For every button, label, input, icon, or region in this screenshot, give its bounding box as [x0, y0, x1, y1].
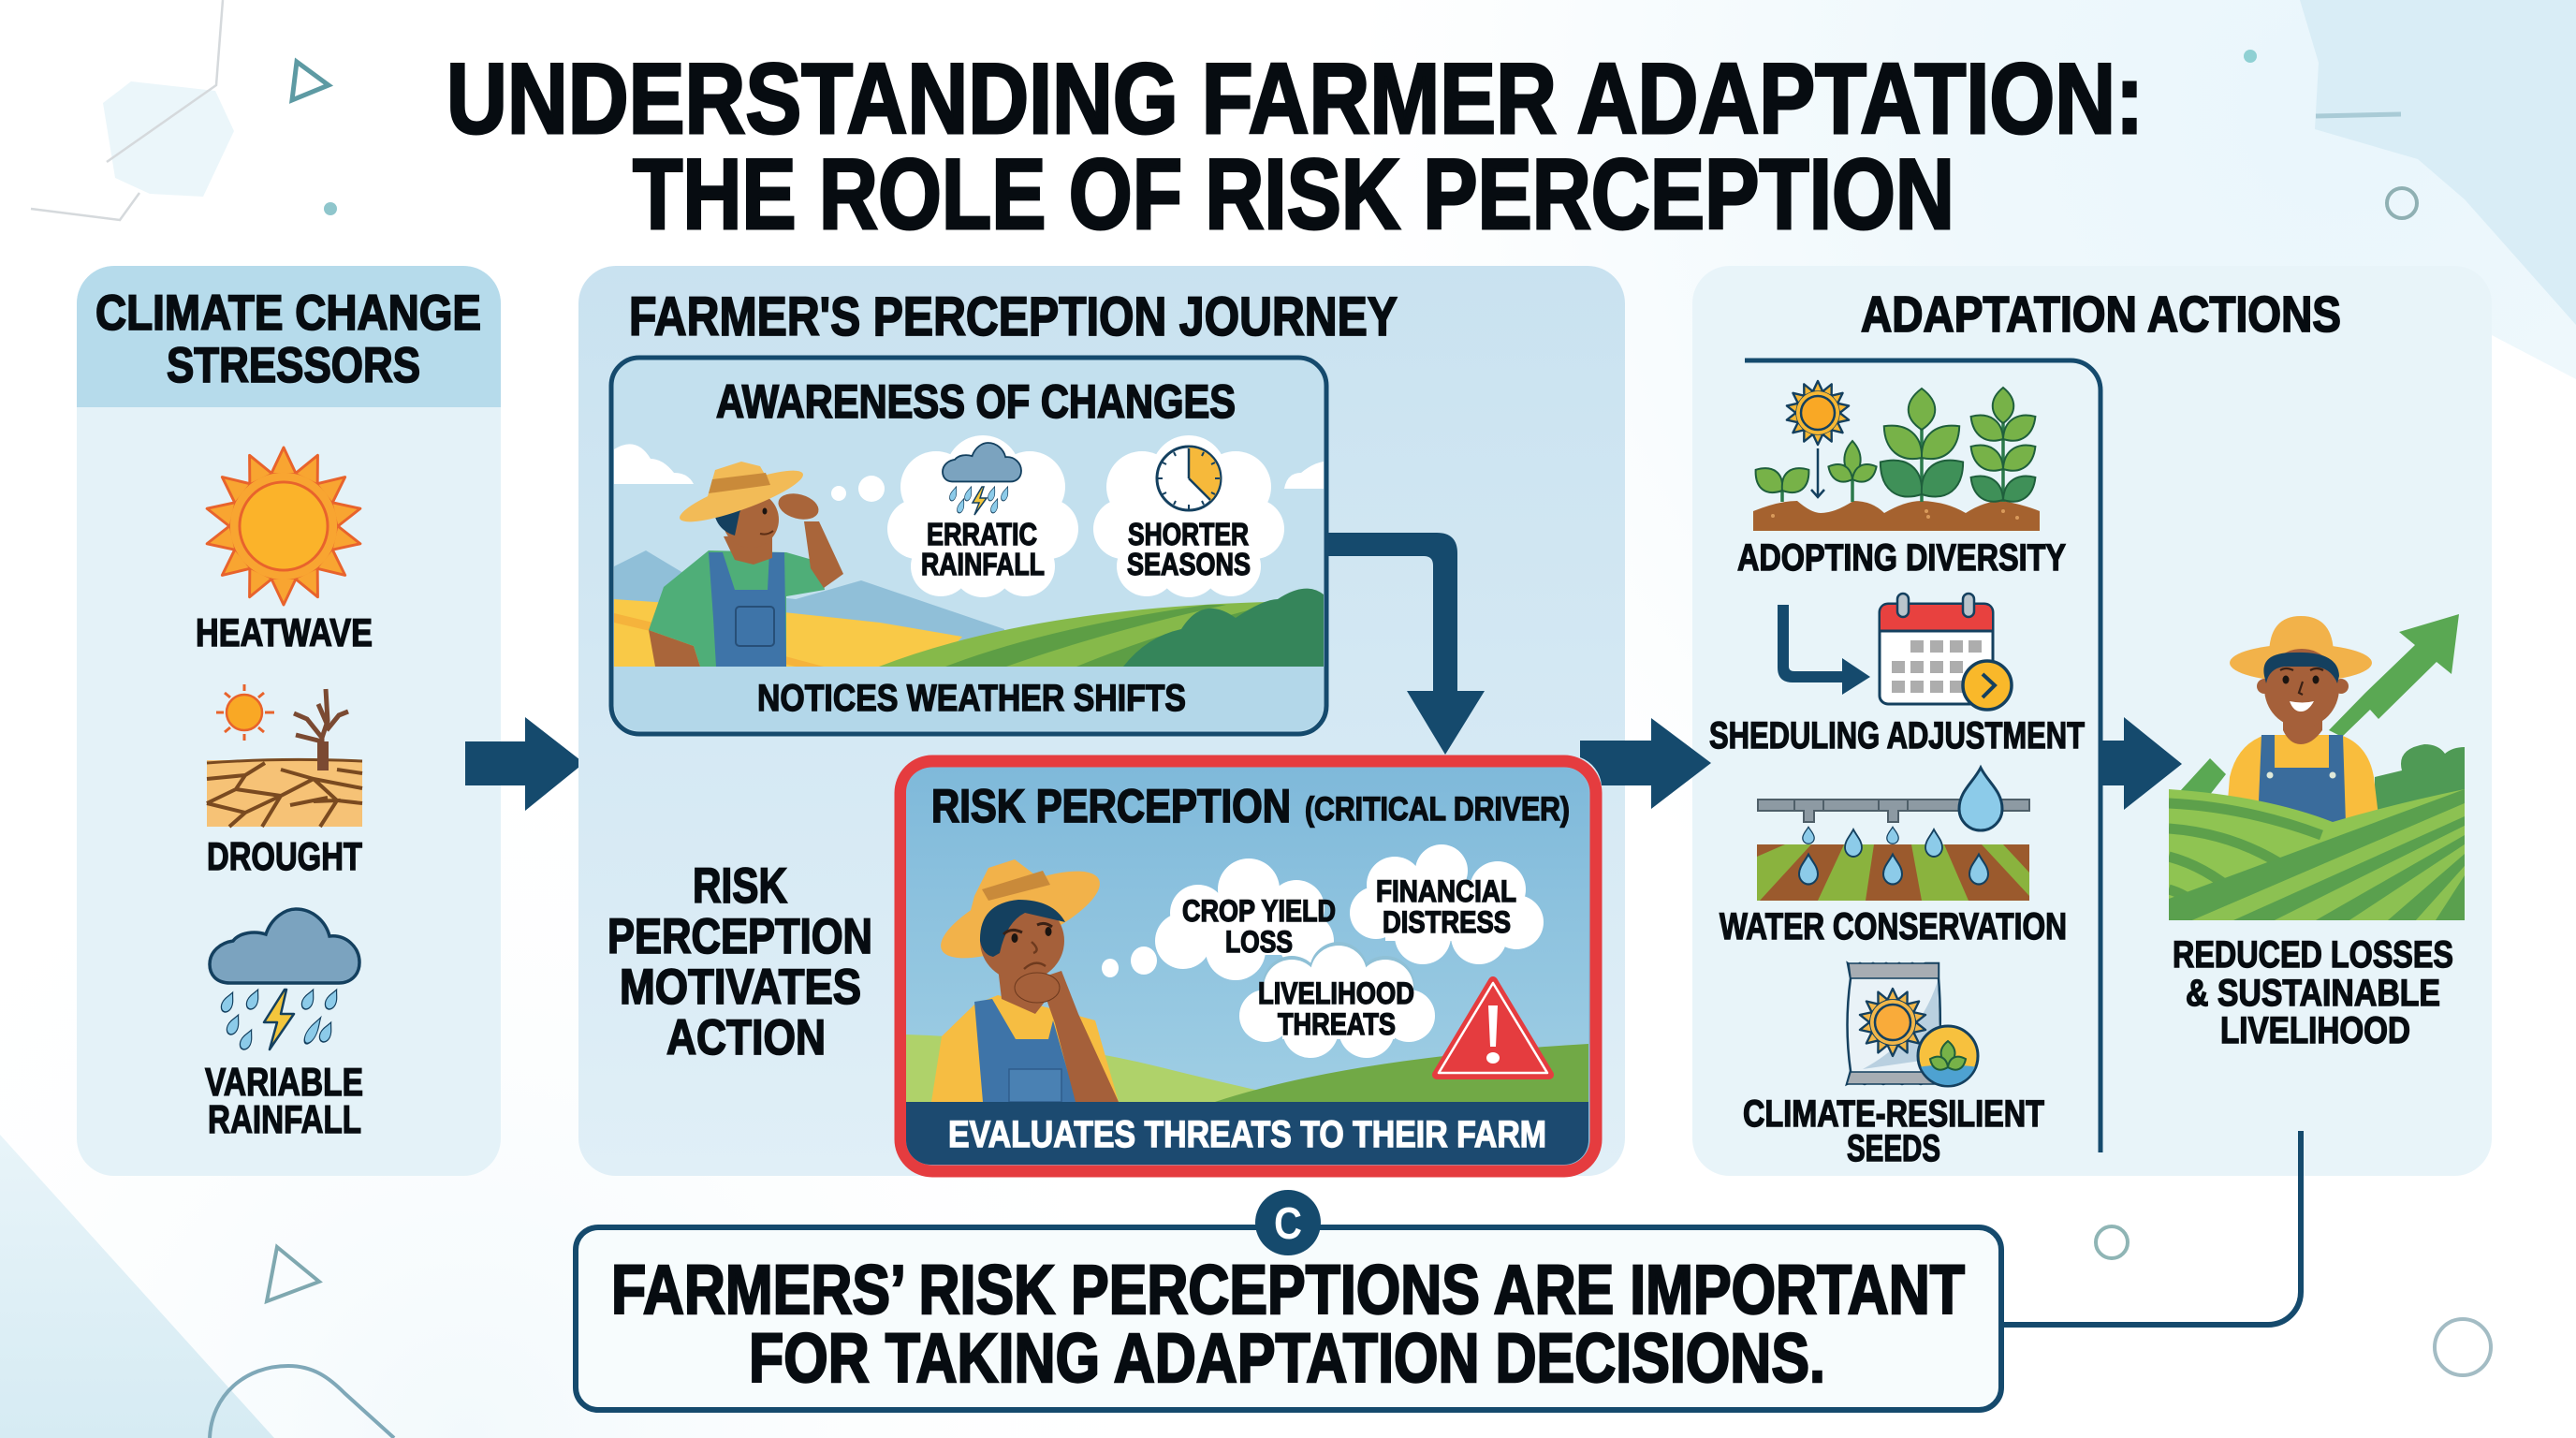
label: reduced losses: LIVELIHOOD: [2220, 1010, 2410, 1051]
label: water conservation: WATER CONSERVATION: [1720, 906, 2067, 947]
thought cloud: shorter seasons: [1093, 435, 1284, 597]
farmer thinking: [930, 854, 1119, 1102]
text: risk perception motivates action: MOTIVATES: [620, 960, 861, 1015]
outcome: reduced losses and sustainable livelihood: [2169, 614, 2465, 1051]
thought cloud: crop yield loss: [1155, 858, 1336, 980]
card heading: risk perception critical driver: (CRITICAL DRIVER): [1305, 791, 1570, 828]
icon: rain cloud: [210, 909, 359, 1051]
text: risk perception motivates action: [607, 858, 872, 1065]
icon: sun heatwave: [204, 448, 363, 605]
thought cloud: financial distress: DISTRESS: [1383, 905, 1511, 939]
card heading: risk perception critical driver: RISK PERCEPTION: [931, 780, 1291, 832]
caption: evaluates threats: EVALUATES THREATS TO THEIR FARM: [948, 1114, 1546, 1155]
thought cloud: livelihood threats: LIVELIHOOD: [1258, 976, 1414, 1010]
conclusion box: [576, 1190, 2001, 1410]
conclusion text: FOR TAKING ADAPTATION DECISIONS.: [749, 1319, 1825, 1397]
thought cloud: shorter seasons: SEASONS: [1127, 547, 1251, 581]
conclusion text: [611, 1251, 1965, 1397]
title: UNDERSTANDING FARMER ADAPTATION:: [446, 42, 2144, 154]
heading: adaptation actions: ADAPTATION ACTIONS: [1861, 286, 2341, 343]
thought cloud: financial distress: [1350, 844, 1544, 964]
thought cloud: erratic rainfall: ERRATIC: [927, 517, 1037, 551]
label: reduced losses: REDUCED LOSSES: [2173, 934, 2453, 976]
icon: calendar: [1778, 594, 2012, 710]
thought cloud: shorter seasons: SHORTER: [1128, 517, 1249, 551]
thought bubbles: [1102, 946, 1157, 977]
arrow: actions to outcome: [2100, 717, 2182, 810]
text: risk perception motivates action: ACTION: [666, 1010, 826, 1065]
thought cloud: crop yield loss: CROP YIELD: [1182, 894, 1336, 928]
label: climate-resilient seeds: CLIMATE-RESILIENT: [1743, 1093, 2044, 1135]
label: climate-resilient seeds: [1743, 1093, 2044, 1169]
thought cloud: erratic rainfall: [887, 435, 1078, 597]
panel: adaptation actions: [1692, 266, 2492, 1176]
thought bubbles: [831, 476, 885, 502]
panel: farmer's perception journey: [578, 266, 1625, 1176]
conclusion text: FARMERS’ RISK PERCEPTIONS ARE IMPORTANT: [611, 1251, 1965, 1328]
label: variable rainfall: VARIABLE: [205, 1060, 363, 1104]
heading: climate change stressors: CLIMATE CHANGE: [95, 286, 481, 341]
text: risk perception motivates action: RISK: [693, 858, 787, 914]
icon: drought: [207, 684, 362, 827]
icon: smiling farmer: [2226, 616, 2379, 824]
panel: climate change stressors: [77, 266, 501, 1176]
thought cloud: erratic rainfall: RAINFALL: [921, 547, 1045, 581]
arrow: stressors to journey: [465, 717, 584, 811]
badge: C: [1255, 1190, 1321, 1255]
title: THE ROLE OF RISK PERCEPTION: [633, 138, 1954, 250]
arrow: awareness to risk perception: [1326, 533, 1485, 755]
thought cloud: financial distress: FINANCIAL: [1376, 874, 1516, 908]
card heading: risk perception critical driver: [931, 780, 1570, 832]
icon: growth arrow: [2180, 614, 2459, 796]
label: sheduling adjustment: SHEDULING ADJUSTMENT: [1709, 715, 2085, 756]
bracket line: [1745, 360, 2100, 1152]
card: awareness of changes: [611, 358, 1326, 734]
label: variable rainfall: RAINFALL: [208, 1097, 361, 1141]
icon: diverse plants: [1749, 381, 2042, 531]
thought cloud: livelihood threats: THREATS: [1278, 1007, 1396, 1041]
badge: C: C: [1274, 1199, 1302, 1249]
card: risk perception: [900, 761, 1596, 1171]
icon: seed bag: [1847, 963, 1979, 1091]
label: drought: DROUGHT: [207, 834, 362, 878]
card heading: awareness of changes: AWARENESS OF CHANGES: [716, 375, 1236, 428]
connector: outcome to conclusion: [2002, 1131, 2301, 1325]
heading: climate change stressors: STRESSORS: [167, 338, 420, 393]
title: [446, 42, 2144, 250]
icon: warning triangle: [1437, 981, 1549, 1075]
caption: notices weather shifts: NOTICES WEATHER SHIFTS: [757, 678, 1186, 719]
heading: climate change stressors: [95, 286, 481, 393]
label: reduced losses: [2173, 934, 2453, 1051]
label: reduced losses: & SUSTAINABLE: [2186, 973, 2440, 1014]
text: risk perception motivates action: PERCEPTION: [607, 909, 872, 964]
icon: striped fields: [2169, 789, 2465, 920]
thought cloud: livelihood threats: [1239, 942, 1435, 1058]
icon: drip irrigation: [1757, 768, 2029, 901]
scene: farm landscape: [614, 444, 1324, 732]
arrow: journey to actions: [1580, 718, 1711, 809]
farmer: [649, 462, 843, 667]
label: heatwave: HEATWAVE: [196, 610, 373, 654]
icon: trees: [2375, 744, 2465, 814]
heading: farmer's perception journey: FARMER'S PERCEPTION JOURNEY: [629, 286, 1398, 347]
label: variable rainfall: [205, 1060, 363, 1141]
thought cloud: crop yield loss: LOSS: [1225, 925, 1293, 959]
caption band: [906, 1102, 1588, 1165]
label: climate-resilient seeds: SEEDS: [1847, 1128, 1940, 1169]
label: adopting diversity: ADOPTING DIVERSITY: [1737, 537, 2066, 579]
